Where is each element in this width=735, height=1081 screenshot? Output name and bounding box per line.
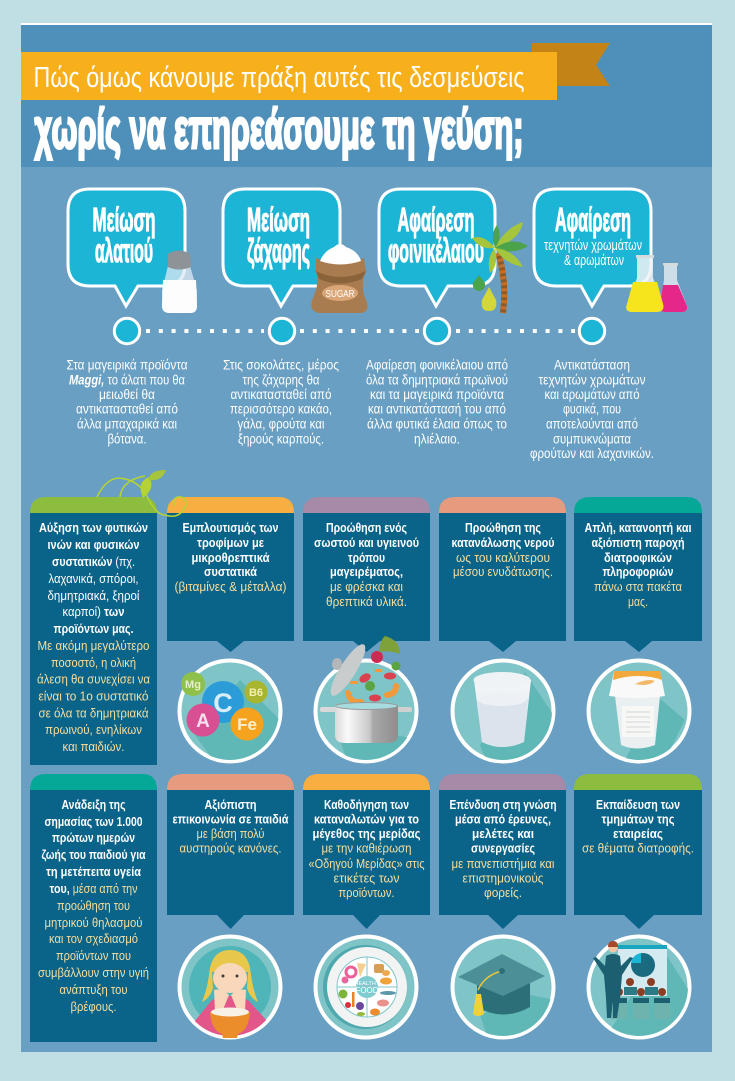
card: cooking: με φρέσκα και bbox=[330, 580, 403, 594]
card: research: με πανεπιστήμια και bbox=[452, 857, 555, 871]
plate bbox=[327, 947, 407, 1027]
mortarboard bbox=[458, 954, 545, 996]
card: infants: του, μέσα από την bbox=[50, 882, 138, 896]
text: sugar description: Στις σοκολάτες, μέρος bbox=[223, 358, 339, 372]
card: portions bbox=[303, 774, 430, 929]
card: children: με βάση πολύ bbox=[196, 827, 265, 841]
card: fibres: πρωινού, ενηλίκων bbox=[45, 723, 142, 737]
text: salt description: Στα μαγειρικά προϊόντα bbox=[66, 358, 188, 372]
plate dividers bbox=[337, 957, 397, 1017]
card: labelling: Απλή, κατανοητή και bbox=[584, 521, 692, 535]
beet bbox=[371, 636, 400, 663]
text: palm oil description: άλλα φυτικά έλαια όπως το bbox=[367, 416, 507, 432]
card: infants: προϊόντων που bbox=[56, 949, 131, 963]
text: palm oil description: όλα τα δημητριακά πρωϊνού bbox=[366, 372, 508, 388]
card: infants bbox=[30, 774, 157, 1042]
text: palm oil description: και αντικατάστασή του από bbox=[368, 402, 506, 416]
card: research: μελέτες και bbox=[472, 827, 534, 841]
text: salt description: μειωθεί θα bbox=[99, 387, 155, 402]
subtitle: Πώς όμως κάνουμε πράξη αυτές τις δεσμεύσεις bbox=[34, 62, 525, 94]
card: fortification bbox=[167, 497, 294, 652]
timeline node 4 bbox=[579, 318, 605, 344]
text: salt description: αντικατασταθεί από bbox=[76, 402, 178, 416]
card: portions: Καθοδήγηση των bbox=[324, 798, 409, 812]
card: research: συνεργασίες bbox=[471, 842, 535, 856]
text: sugar description bbox=[223, 358, 339, 446]
text: salt description bbox=[66, 358, 188, 446]
speech bubble: salt: αλατιού bbox=[95, 232, 153, 269]
icon: glass of water bbox=[452, 660, 560, 770]
card: infants: βρέφους. bbox=[70, 1000, 116, 1014]
card: fortification: Εμπλουτισμός των bbox=[182, 521, 279, 535]
timeline node 3 bbox=[424, 318, 450, 344]
speech bubble: sugar: ζάχαρης bbox=[247, 232, 310, 269]
plate label: HEALTHY bbox=[355, 981, 380, 987]
plate label: FOOD bbox=[355, 986, 379, 995]
card: fibres: Αύξηση των φυτικών bbox=[39, 521, 148, 535]
icon: flasks bbox=[626, 255, 687, 312]
card: portions: «Οδηγού Μερίδας» στις bbox=[308, 857, 424, 871]
card: cooking: σωστού και υγιεινού bbox=[314, 536, 419, 550]
card: research: φορείς. bbox=[484, 886, 522, 900]
speech bubble: salt bbox=[68, 189, 185, 306]
card: infants: ζωής του παιδιού για bbox=[42, 848, 146, 862]
card: infants: και τον σχεδιασμό bbox=[49, 932, 138, 946]
audience bbox=[611, 978, 670, 1019]
text: sugar description: της ζάχαρης θα bbox=[242, 372, 320, 388]
card: fibres: ποσοστό, η ολική bbox=[51, 656, 136, 670]
card: training: τμημάτων της bbox=[602, 812, 674, 826]
lid knob bbox=[332, 658, 342, 670]
icon: palm tree and oil drop bbox=[472, 222, 528, 313]
speech bubble: palm oil bbox=[379, 189, 495, 306]
card: children bbox=[167, 774, 294, 929]
text: palm oil description: ηλιέλαιο. bbox=[414, 432, 460, 446]
card: fortification: (βιταμίνες & μέταλλα) bbox=[174, 580, 286, 594]
text: colours description bbox=[530, 358, 654, 461]
card: cooking: μαγειρέματος, bbox=[330, 565, 403, 579]
text: palm oil description: και τα μαγειρικά προϊόντα bbox=[370, 387, 504, 402]
board bbox=[618, 945, 667, 996]
speech bubble: palm oil: Αφαίρεση bbox=[398, 201, 474, 238]
food items bbox=[338, 963, 396, 1016]
text: colours description: τεχνητών χρωμάτων bbox=[538, 372, 646, 388]
icon: salt shaker bbox=[162, 250, 197, 313]
card: cooking bbox=[303, 497, 430, 652]
card: research: μέσα από έρευνες, bbox=[455, 812, 551, 826]
speech bubble: sugar: Μείωση bbox=[247, 201, 310, 238]
text: colours description: και αρωμάτων από bbox=[544, 387, 640, 402]
vegetables bbox=[348, 662, 400, 702]
presenter figure bbox=[593, 941, 633, 1018]
text: palm oil description bbox=[366, 358, 508, 446]
top white edge bbox=[21, 23, 712, 25]
card: fibres bbox=[30, 497, 157, 765]
card: infants: συμβάλλουν στην υγιή bbox=[38, 966, 149, 980]
icon: graduation cap bbox=[452, 936, 555, 1045]
ribbon tail bbox=[532, 43, 610, 86]
card: portions: με την καθιέρωση bbox=[322, 842, 412, 856]
card: water: Προώθηση της bbox=[465, 521, 541, 535]
card: infants: σημασίας των 1.000 bbox=[44, 815, 143, 829]
vitamin B6: B6 bbox=[249, 687, 263, 699]
timeline bbox=[114, 318, 605, 344]
vitamin C: C bbox=[213, 688, 233, 718]
card: training bbox=[574, 774, 702, 929]
icon: cooking pot bbox=[316, 636, 420, 770]
hair bbox=[202, 950, 258, 1002]
text: sugar description: περισσότερο κακάο, bbox=[230, 402, 332, 416]
card: fibres: είναι το 1ο συστατικό bbox=[38, 690, 149, 704]
card: research: επιστημονικούς bbox=[462, 872, 544, 886]
tassel bbox=[473, 968, 505, 1016]
speech bubble: colours: τεχνητών χρωμάτων bbox=[544, 237, 642, 254]
pot lid bbox=[325, 640, 371, 700]
card: labelling: πάνω στα πακέτα bbox=[594, 580, 682, 594]
arms bbox=[214, 990, 246, 1012]
card: research: Επένδυση στη γνώση bbox=[450, 798, 556, 812]
face bbox=[213, 963, 247, 993]
icon: girl with bowl bbox=[180, 936, 280, 1040]
card: research bbox=[439, 774, 566, 929]
card: portions: μέγεθος της μερίδας bbox=[312, 827, 420, 841]
text: salt description: Maggi, το άλατι που θα bbox=[69, 372, 185, 388]
speech bubble: colours: & αρωμάτων bbox=[564, 252, 624, 269]
speech bubble: colours bbox=[534, 189, 651, 306]
text: colours description: φρούτων και λαχανικών. bbox=[530, 446, 654, 461]
bowl bbox=[210, 1012, 250, 1038]
card: fibres: Με ακόμη μεγαλύτερο bbox=[38, 639, 150, 653]
card: fibres: άλεση θα συνεχίσει να bbox=[37, 672, 150, 686]
eyes bbox=[222, 974, 238, 978]
speech bubble: palm oil: φοινικέλαιου bbox=[388, 232, 484, 269]
text: palm oil description: Αφαίρεση φοινικέλαιου από bbox=[366, 358, 508, 372]
card: training: εταιρείας bbox=[613, 827, 663, 841]
text: colours description: φυσικά, που bbox=[563, 402, 621, 416]
card: fibres: ινών και φυσικών bbox=[48, 538, 140, 552]
pot body bbox=[335, 705, 398, 743]
card: infants: Ανάδειξη της bbox=[62, 798, 126, 812]
card: infants: προώθηση του bbox=[57, 899, 130, 913]
text: colours description: συμπυκνώματα bbox=[553, 432, 631, 446]
plate label bbox=[355, 976, 380, 998]
icon: yogurt pot bbox=[588, 660, 690, 770]
pie chart bbox=[631, 953, 655, 977]
header band bbox=[21, 25, 712, 167]
card: fortification: τροφίμων με bbox=[197, 536, 264, 550]
icon: sugar sack: SUGAR bbox=[326, 289, 354, 300]
pot handles bbox=[320, 707, 336, 712]
card: portions: προϊόντων. bbox=[338, 886, 394, 900]
text: colours description: αποτελούνται από bbox=[546, 416, 638, 432]
vitamin A: A bbox=[196, 711, 210, 732]
card: water: ως του καλύτερου bbox=[456, 551, 550, 565]
card: cooking: τρόπου bbox=[348, 551, 385, 565]
speech bubble: sugar bbox=[223, 189, 340, 306]
speech bubble: salt: Μείωση bbox=[92, 201, 156, 238]
card: children: επικοινωνία σε παιδιά bbox=[172, 812, 289, 826]
text: sugar description: αντικατασταθεί από bbox=[230, 387, 332, 402]
card: cooking: θρεπτικά υλικά. bbox=[326, 595, 407, 609]
card: cooking: Προώθηση ενός bbox=[326, 521, 407, 535]
cap base bbox=[477, 983, 530, 1014]
card: infants: μητρικού θηλασμού bbox=[44, 916, 143, 930]
icon: sugar sack bbox=[311, 244, 367, 313]
card: fibres: σε όλα τα δημητριακά bbox=[38, 706, 148, 720]
card: fibres: δημητριακά, ξηροί bbox=[48, 589, 140, 603]
timeline node 1 bbox=[114, 318, 140, 344]
dotted connectors bbox=[146, 329, 264, 333]
card: training: Εκπαίδευση των bbox=[596, 798, 680, 812]
text: sugar description: γάλα, φρούτα και bbox=[238, 416, 324, 432]
card: fibres: συστατικών (πχ. bbox=[52, 555, 135, 569]
text: salt description: βότανα. bbox=[108, 432, 146, 446]
card: fibres: προϊόντων μας. bbox=[54, 622, 134, 636]
text: salt description: άλλα μπαχαρικά και bbox=[77, 416, 177, 432]
card: children: Αξιόπιστη bbox=[204, 798, 256, 812]
speech bubble: colours: Αφαίρεση bbox=[555, 201, 631, 238]
icon: presenter bbox=[588, 936, 695, 1045]
card: portions: ετικέτες των bbox=[334, 872, 400, 886]
text: colours description: Αντικατάσταση bbox=[554, 358, 630, 372]
card: labelling bbox=[574, 497, 702, 652]
card: fortification: συστατικά bbox=[204, 565, 257, 579]
card: labelling: διατροφικών bbox=[604, 551, 672, 565]
vitamin Mg: Mg bbox=[185, 679, 201, 691]
card: fibres: λαχανικά, σπόροι, bbox=[48, 572, 138, 586]
card: portions: καταναλωτών για το bbox=[314, 812, 419, 826]
card: fibres: καρποί) των bbox=[62, 605, 125, 619]
card: labelling: αξιόπιστη παροχή bbox=[592, 536, 684, 550]
card: labelling: πληροφοριών bbox=[602, 565, 674, 579]
card: water bbox=[439, 497, 566, 652]
icon: healthy plate bbox=[316, 936, 416, 1038]
card: fibres: και παιδιών. bbox=[62, 740, 124, 754]
dress bbox=[194, 996, 266, 1036]
icon: green vine bbox=[97, 470, 186, 516]
card: infants: τη μετέπειτα υγεία bbox=[46, 865, 141, 879]
timeline node 2 bbox=[269, 318, 295, 344]
card: infants: ανάπτυξη του bbox=[60, 983, 128, 997]
card: fortification: μικροθρεπτικά bbox=[192, 551, 270, 565]
text: sugar description: ξηρούς καρπούς. bbox=[238, 432, 324, 446]
card: water: μέσου ενυδάτωσης. bbox=[453, 565, 553, 579]
icon: vitamins bbox=[180, 660, 290, 770]
card: labelling: μας. bbox=[628, 595, 648, 609]
card: training: σε θέματα διατροφής. bbox=[582, 842, 694, 856]
card: water: κατανάλωσης νερού bbox=[452, 536, 554, 550]
vitamin Fe: Fe bbox=[237, 715, 257, 734]
yellow banner bbox=[21, 52, 557, 100]
card: infants: πρώτων ημερών bbox=[52, 831, 135, 845]
card: children: αυστηρούς κανόνες. bbox=[180, 842, 282, 856]
